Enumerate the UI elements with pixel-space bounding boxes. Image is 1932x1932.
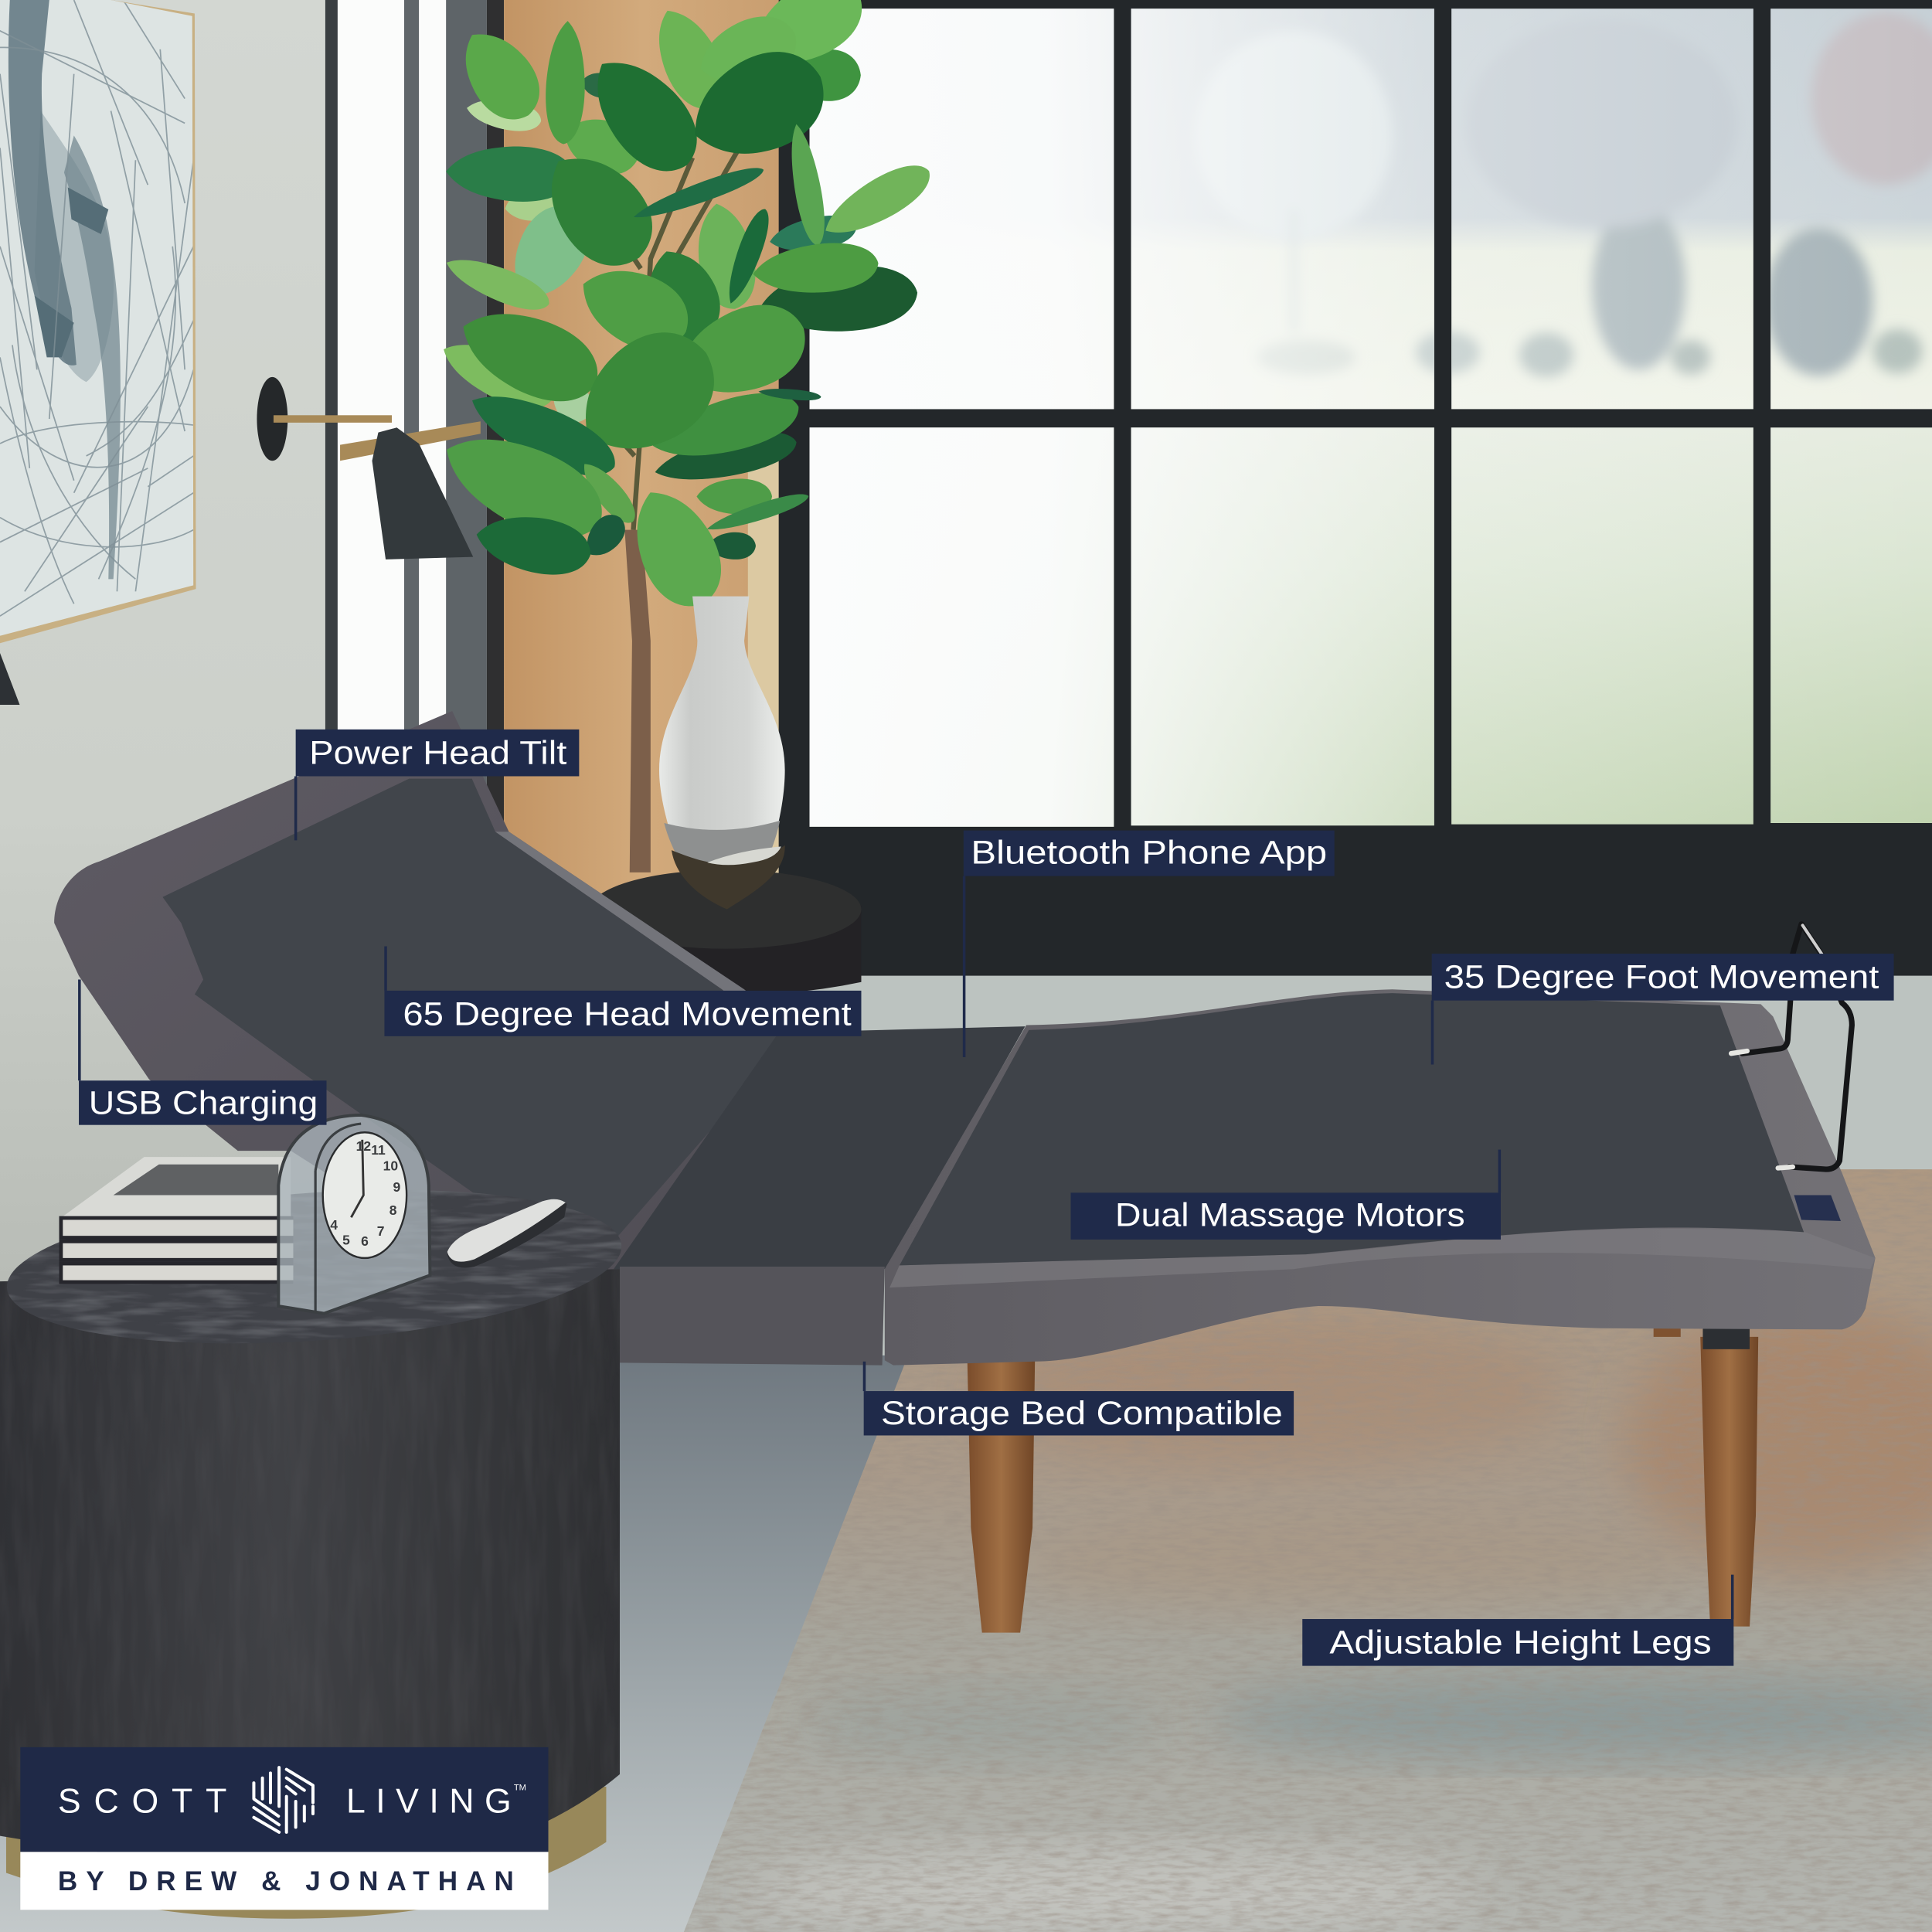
second lamp edge	[0, 653, 20, 705]
head section side edge	[495, 832, 801, 1043]
stippled swirl band	[42, 113, 114, 382]
wood column	[504, 0, 781, 998]
foot section mesh	[900, 993, 1804, 1265]
foot section fabric top	[885, 989, 1876, 1366]
logo navy panel	[20, 1747, 549, 1852]
label: Storage Bed Compatible	[864, 1362, 1294, 1435]
head section mesh	[162, 779, 788, 1238]
logo white panel	[20, 1852, 549, 1910]
label: Bluetooth Phone App	[964, 831, 1335, 1057]
window frame	[779, 0, 1932, 976]
garden view through panes	[801, 0, 1932, 838]
decorative bowl	[672, 845, 785, 910]
trunk	[624, 530, 651, 872]
background: room wall	[0, 0, 518, 1355]
foreground round table	[0, 1172, 628, 1919]
foot wire retainer	[1731, 924, 1852, 1169]
bed tag	[1794, 1196, 1841, 1221]
clock dial	[323, 1132, 406, 1258]
adjustable bed base	[54, 711, 1876, 1633]
label: Dual Massage Motors	[1071, 1150, 1501, 1240]
clock numerals: 8	[389, 1202, 397, 1218]
label: USB Charging: USB Charging	[89, 1084, 318, 1121]
clock numerals: 11	[371, 1142, 386, 1158]
label: 35 Degree Foot Movement	[1432, 954, 1894, 1065]
table top	[7, 1190, 621, 1343]
trademark: TM	[514, 1784, 526, 1793]
stack of books	[60, 1157, 293, 1284]
wall lamp	[257, 377, 481, 560]
brass base	[6, 1787, 606, 1919]
fiddle leaf plant	[430, 0, 939, 872]
clock numerals: 10	[383, 1158, 398, 1174]
leaves	[464, 94, 543, 135]
logo word LIVING: LIVING	[346, 1782, 512, 1820]
mid section front	[620, 1267, 885, 1366]
table clock	[278, 1115, 430, 1314]
label: Adjustable Height Legs: Adjustable Height Legs	[1329, 1624, 1712, 1662]
side table behind the bed	[589, 870, 861, 995]
brand logo: Scott Living	[20, 1747, 549, 1910]
clock numerals: 9	[393, 1179, 401, 1195]
large window	[779, 0, 1932, 976]
head section fabric frame	[54, 711, 801, 1362]
wall art	[0, 0, 197, 647]
label: Storage Bed Compatible: Storage Bed Compatible	[881, 1395, 1283, 1432]
label: Bluetooth Phone App: Bluetooth Phone App	[971, 835, 1327, 872]
narrow side window	[325, 0, 504, 887]
remote control	[447, 1199, 566, 1267]
label: Dual Massage Motors: Dual Massage Motors	[1115, 1196, 1465, 1233]
logo tagline: BY DREW & JONATHAN	[58, 1866, 514, 1896]
clock numerals: 7	[377, 1223, 385, 1239]
label: 65 Degree Head Movement	[384, 946, 861, 1036]
label: Power Head Tilt	[296, 730, 579, 840]
mid section mesh	[614, 1026, 1026, 1269]
label: 35 Degree Foot Movement: 35 Degree Foot Movement	[1444, 959, 1879, 996]
logo hexagon mark	[253, 1767, 313, 1832]
label: Power Head Tilt: Power Head Tilt	[309, 735, 566, 772]
clock numerals: 6	[361, 1233, 369, 1249]
bed legs	[968, 1321, 1758, 1633]
white vase	[659, 597, 785, 862]
floor behind the bed	[779, 976, 1932, 1370]
clock numerals: 4	[330, 1217, 338, 1233]
area rug	[665, 1158, 1932, 1932]
clock numerals: 5	[342, 1232, 350, 1247]
label: 65 Degree Head Movement: 65 Degree Head Movement	[403, 996, 852, 1033]
clock numerals: 12	[356, 1138, 371, 1154]
label: Adjustable Height Legs	[1302, 1575, 1733, 1666]
foot top border highlight	[889, 1229, 1876, 1287]
label: USB Charging	[79, 980, 327, 1125]
clock numerals	[330, 1138, 401, 1249]
floor in front of the bed	[0, 1355, 912, 1932]
logo word SCOTT: SCOTT	[58, 1782, 226, 1820]
table body	[0, 1269, 622, 1897]
